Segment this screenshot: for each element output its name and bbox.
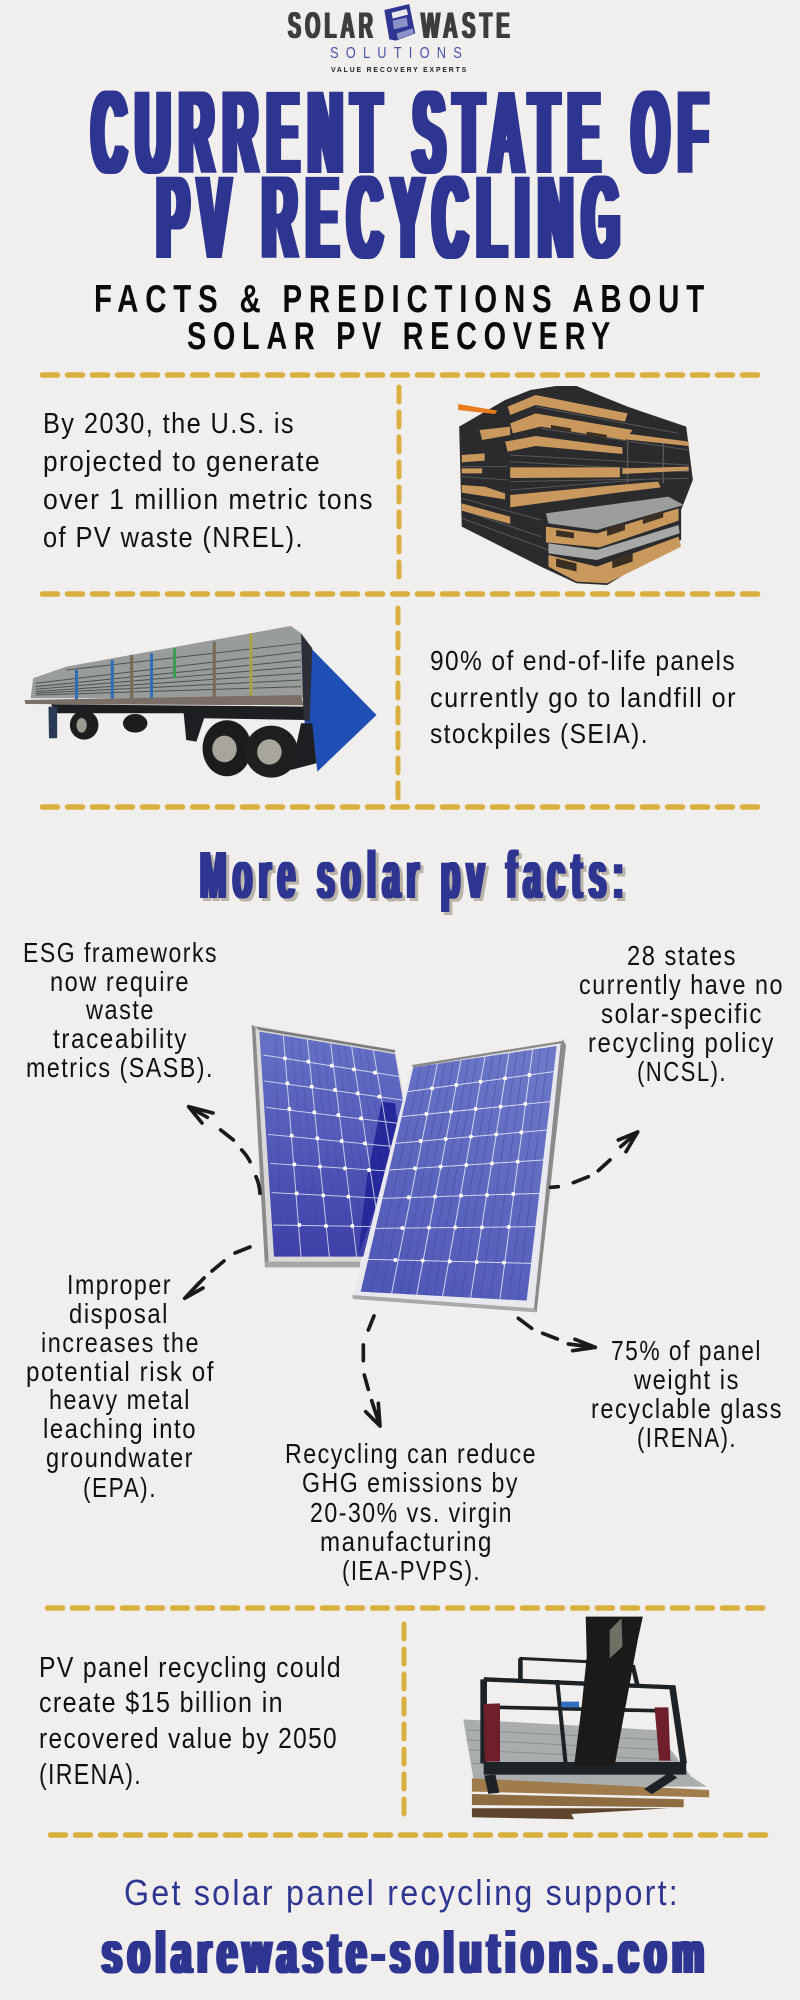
text: SEIA fact: stockpiles (SEIA). — [430, 718, 649, 749]
fact: NCSL: solar-specific — [601, 998, 763, 1029]
logo: VALUE RECOVERY EXPERTS — [331, 65, 468, 74]
text: NREL fact: of PV waste (NREL). — [43, 522, 304, 554]
image: forklift lifting panels — [463, 1617, 709, 1819]
fact: ESG: now require — [50, 966, 190, 997]
fact: EPA: groundwater — [46, 1442, 194, 1473]
text: recovered value fact: PV panel recycling could — [39, 1652, 342, 1684]
fact: IEA-PVPS: 20-30% vs. virgin — [310, 1497, 513, 1528]
text: recovered value fact — [39, 1652, 342, 1791]
subtitle — [94, 278, 711, 358]
fact: EPA: (EPA). — [83, 1472, 157, 1503]
fact: EPA: disposal — [69, 1298, 169, 1329]
fact: IEA-PVPS: Recycling can reduce — [285, 1438, 537, 1469]
text: SEIA fact: currently go to landfill or — [430, 682, 737, 713]
fact: IRENA glass: 75% of panel — [611, 1335, 762, 1366]
text: NREL fact: By 2030, the U.S. is — [43, 408, 295, 440]
fact: ESG: traceability — [53, 1023, 188, 1054]
text: SEIA fact: 90% of end-of-life panels — [430, 645, 736, 676]
fact: IEA-PVPS: (IEA-PVPS). — [342, 1555, 481, 1586]
image: stacked pallets of panels — [458, 386, 693, 585]
fact: EPA: increases the — [41, 1327, 200, 1358]
fact: EPA — [26, 1269, 215, 1503]
fact: NCSL: recycling policy — [588, 1027, 775, 1058]
call to action: Get solar panel recycling support: — [124, 1872, 680, 1913]
logo: SOLUTIONS — [330, 45, 469, 62]
text: recovered value fact: create $15 billion in — [39, 1687, 284, 1719]
arrow: to EPA fact — [185, 1247, 250, 1298]
fact: IEA-PVPS: manufacturing — [320, 1526, 493, 1557]
fact: EPA: leaching into — [43, 1413, 197, 1444]
text: recovered value fact: recovered value by 2050 — [39, 1723, 338, 1755]
right panel — [353, 1038, 567, 1312]
dashed dividers, top section — [42, 375, 758, 807]
image: flatbed truck with panels — [24, 626, 377, 778]
subtitle: SOLAR PV RECOVERY — [187, 315, 617, 358]
left panel — [252, 1025, 429, 1267]
text: recovered value fact: (IRENA). — [39, 1759, 142, 1791]
text: NREL fact: projected to generate — [43, 446, 321, 478]
text: NREL fact: over 1 million metric tons — [43, 484, 374, 516]
fact: IRENA glass: weight is — [633, 1364, 740, 1395]
fact: ESG: ESG frameworks — [23, 937, 218, 968]
fact: NCSL — [579, 940, 784, 1087]
fact: EPA: Improper — [67, 1269, 172, 1300]
illustration: two solar panels — [252, 1025, 567, 1312]
fact: IEA-PVPS: GHG emissions by — [302, 1467, 519, 1498]
fact: ESG — [23, 937, 218, 1083]
logo: SOLAR — [288, 5, 377, 46]
fact: IRENA glass: (IRENA). — [637, 1422, 737, 1453]
title — [92, 67, 717, 284]
text: SEIA fact — [430, 645, 737, 749]
fact: EPA: potential risk of — [26, 1356, 215, 1387]
logo — [288, 4, 514, 74]
fact: ESG: metrics (SASB). — [26, 1052, 214, 1083]
fact: IRENA glass — [591, 1335, 783, 1453]
dashed dividers, bottom section — [48, 1608, 766, 1835]
fact: IEA-PVPS — [285, 1438, 537, 1586]
arrow: to IRENA glass fact — [518, 1318, 595, 1351]
fact: ESG: waste — [85, 994, 155, 1025]
fact: NCSL: 28 states — [627, 940, 737, 971]
fact: EPA: heavy metal — [49, 1384, 191, 1415]
fact: NCSL: (NCSL). — [637, 1056, 727, 1087]
arrow: to NCSL fact — [551, 1132, 638, 1187]
icon: solar panel logo mark — [384, 4, 417, 41]
arrow: to IEA-PVPS fact — [363, 1316, 380, 1426]
logo: WASTE — [421, 5, 514, 46]
text: NREL fact — [43, 408, 374, 554]
arrow: to ESG fact — [189, 1107, 260, 1193]
